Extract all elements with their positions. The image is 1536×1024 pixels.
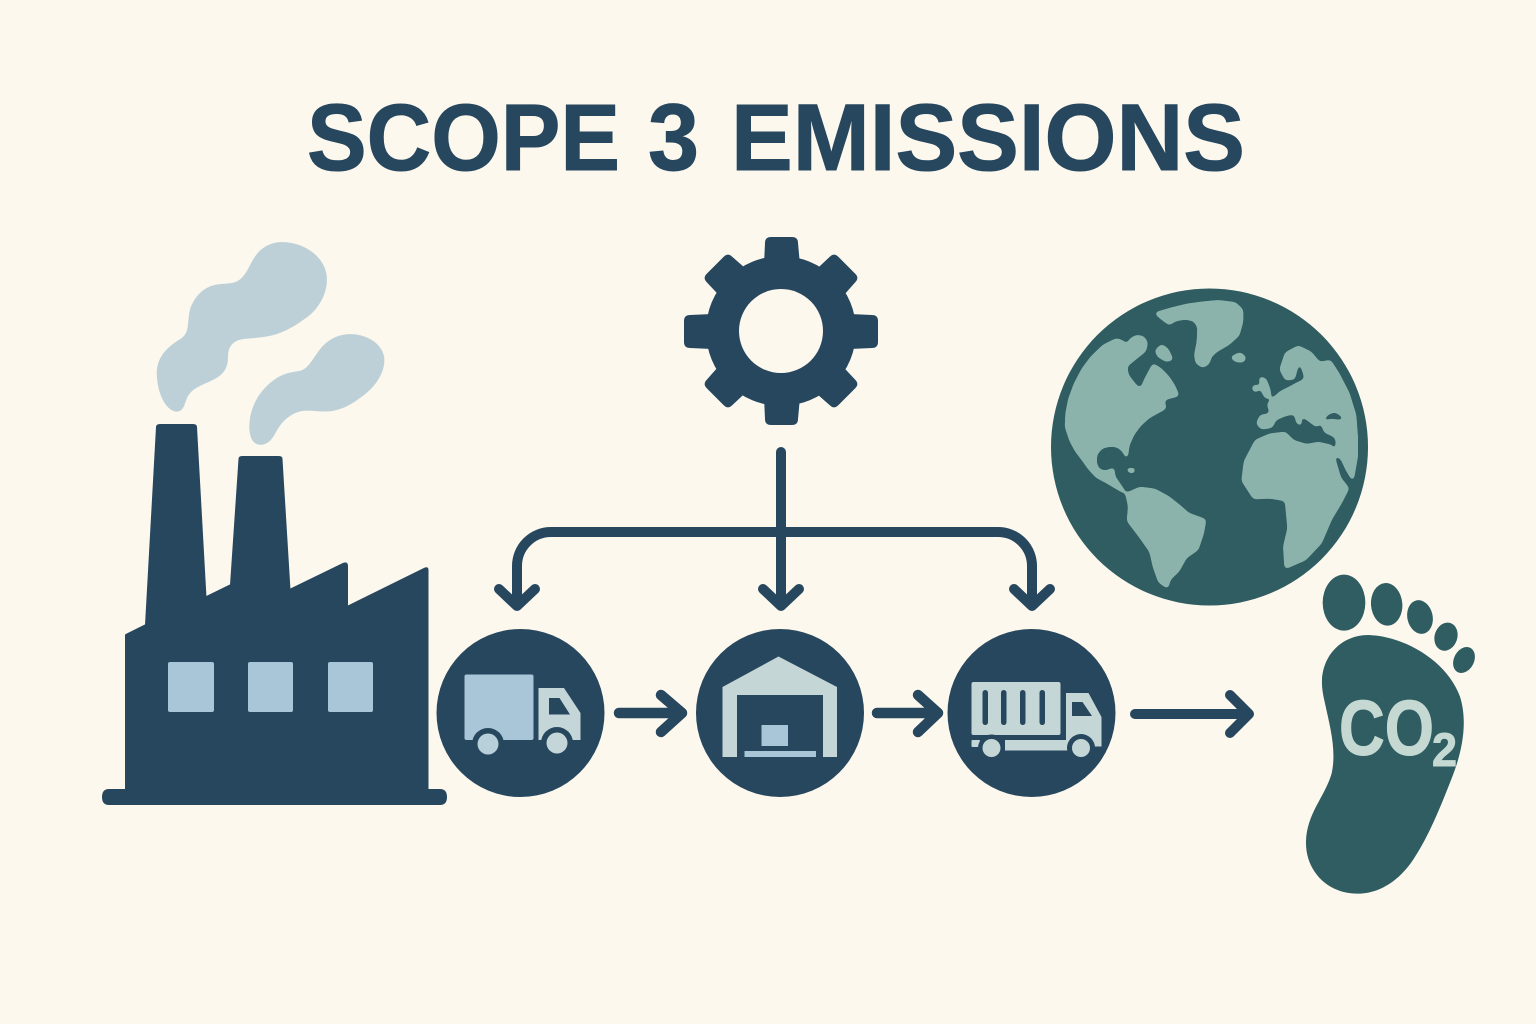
factory window 3 bbox=[328, 662, 373, 712]
icon: gear bbox=[684, 237, 878, 425]
arrow: truck to warehouse bbox=[619, 695, 682, 732]
factory building bbox=[103, 425, 446, 804]
factory window 2 bbox=[248, 662, 293, 712]
smoke plume: left bbox=[157, 242, 327, 412]
truck container bbox=[972, 682, 1060, 735]
title: EMISSIONS bbox=[731, 85, 1245, 191]
stage: warehouse bbox=[696, 629, 864, 797]
icon: factory with smoke bbox=[103, 242, 446, 804]
icon: carbon footprint bbox=[1306, 575, 1479, 894]
factory window 1 bbox=[168, 662, 214, 712]
title: 3 bbox=[648, 85, 699, 191]
truck cargo box bbox=[464, 674, 534, 740]
stage: container truck bbox=[948, 629, 1116, 797]
footprint toes bbox=[1323, 575, 1479, 677]
footprint label: CO2: CO bbox=[1339, 684, 1434, 772]
truck wheels bbox=[978, 734, 1005, 762]
truck cab bbox=[538, 688, 580, 740]
icon: globe bbox=[1051, 288, 1368, 606]
stage: delivery truck bbox=[436, 629, 604, 797]
arrow: warehouse to container truck bbox=[877, 695, 938, 732]
arrows: gear branching down to three stages bbox=[499, 452, 1050, 606]
warehouse building bbox=[722, 656, 837, 757]
footprint sole bbox=[1306, 635, 1464, 894]
truck cab and chassis bbox=[1005, 693, 1102, 750]
footprint label: CO2: 2 bbox=[1432, 723, 1457, 776]
warehouse pallet bbox=[744, 751, 816, 757]
warehouse crate bbox=[762, 725, 788, 746]
smoke plume: right bbox=[249, 334, 384, 445]
arrow: transport to footprint bbox=[1135, 695, 1249, 733]
title: SCOPE bbox=[307, 85, 620, 191]
truck wheels bbox=[472, 728, 504, 760]
